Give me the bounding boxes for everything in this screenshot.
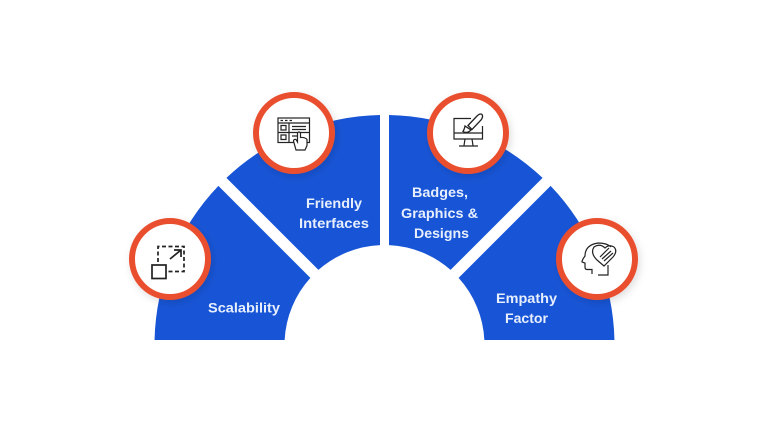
panel: friendly interfaces segment bbox=[226, 115, 380, 270]
icon: monitor with paintbrush bbox=[454, 114, 483, 146]
icon: resize squares bbox=[152, 246, 184, 278]
label: Badges, Graphics & Designs: Designs bbox=[414, 225, 469, 241]
badge: friendly interfaces icon bbox=[256, 95, 332, 171]
panel: scalability segment bbox=[155, 186, 310, 340]
label: Empathy Factor: Factor bbox=[505, 310, 549, 326]
label: Empathy Factor: Empathy bbox=[496, 290, 557, 306]
label: Badges, Graphics & Designs: Graphics & bbox=[401, 205, 478, 221]
icon: web interface with pointing hand bbox=[278, 118, 310, 150]
label: Empathy Factor bbox=[496, 290, 557, 326]
label: Friendly Interfaces: Friendly bbox=[306, 195, 362, 211]
label: Friendly Interfaces bbox=[299, 195, 369, 231]
badge: scalability icon bbox=[132, 221, 208, 297]
label: Scalability: Scalability bbox=[208, 300, 280, 316]
badge: empathy factor icon bbox=[559, 221, 635, 297]
label: Badges, Graphics & Designs bbox=[401, 184, 478, 241]
badge: badges and graphics icon bbox=[430, 95, 506, 171]
label: Badges, Graphics & Designs: Badges, bbox=[412, 184, 468, 200]
panel: empathy factor segment bbox=[459, 186, 614, 340]
icon: head with heart and hand bbox=[582, 243, 616, 275]
panel: badges, graphics and designs segment bbox=[389, 115, 543, 270]
label: Friendly Interfaces: Interfaces bbox=[299, 215, 369, 231]
